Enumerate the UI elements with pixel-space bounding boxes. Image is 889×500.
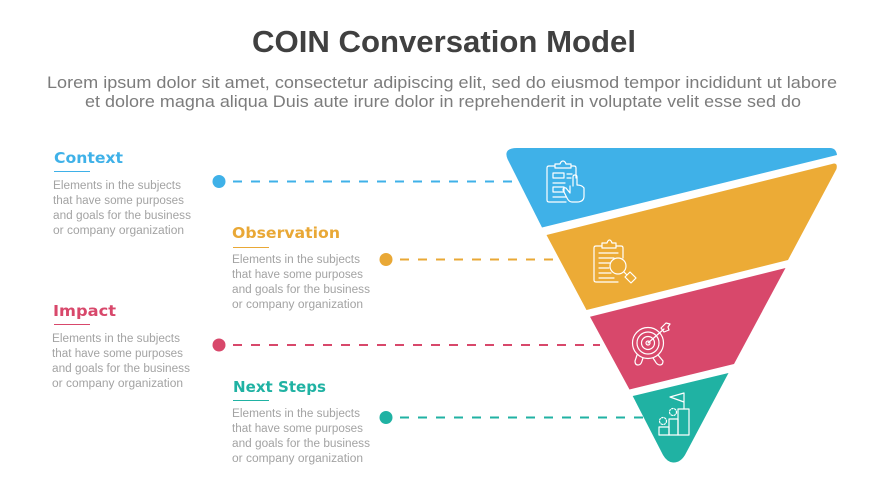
body: context: [53, 180, 191, 237]
panel: context text: [53, 149, 191, 237]
panel: next steps text: [232, 378, 370, 465]
heading: observation: Observation: [232, 224, 340, 242]
body: context: and goals for the business: [53, 210, 191, 222]
body: context: Elements in the subjects: [53, 180, 181, 192]
body: next steps: and goals for the business: [232, 438, 370, 450]
heading: next steps: Next Steps: [233, 378, 326, 396]
heading: impact: Impact: [53, 302, 117, 320]
body: observation: [232, 254, 370, 311]
segment: next steps: [633, 373, 728, 463]
body: next steps: [232, 408, 370, 465]
icon: steps with flag: [659, 393, 689, 435]
body: next steps: Elements in the subjects: [232, 408, 360, 420]
subtitle: et dolore magna aliqua Duis aute irure dolor in reprehenderit in voluptate velit esse sed do: [85, 93, 801, 111]
body: impact: and goals for the business: [52, 363, 190, 375]
connector: context: [212, 175, 512, 188]
body: observation: Elements in the subjects: [232, 254, 360, 266]
connector: observation: [380, 253, 553, 266]
body: next steps: that have some purposes: [232, 423, 363, 435]
icon: clipboard with magnifier: [594, 240, 636, 283]
segment: observation: [546, 164, 837, 310]
panel: observation text: [232, 224, 370, 311]
subtitle: [47, 74, 837, 111]
body: impact: that have some purposes: [52, 348, 183, 360]
body: context: that have some purposes: [53, 195, 184, 207]
body: next steps: or company organization: [232, 453, 363, 465]
body: observation: and goals for the business: [232, 284, 370, 296]
heading: context: Context: [54, 149, 124, 167]
title: COIN Conversation Model: [252, 24, 636, 59]
body: observation: or company organization: [232, 299, 363, 311]
subtitle: Lorem ipsum dolor sit amet, consectetur adipiscing elit, sed do eiusmod tempor incididunt ut labore: [47, 74, 837, 92]
panel: impact text: [52, 302, 190, 390]
body: impact: or company organization: [52, 378, 183, 390]
connector: impact: [212, 338, 600, 352]
body: context: or company organization: [53, 225, 184, 237]
body: impact: Elements in the subjects: [52, 333, 180, 345]
icon: target with arrow: [632, 323, 670, 365]
body: impact: [52, 333, 190, 390]
icon: clipboard with pointing hand: [547, 161, 584, 202]
segment: impact: [590, 268, 786, 390]
body: observation: that have some purposes: [232, 269, 363, 281]
segment: context: [506, 148, 837, 228]
connector: next steps: [380, 411, 643, 424]
